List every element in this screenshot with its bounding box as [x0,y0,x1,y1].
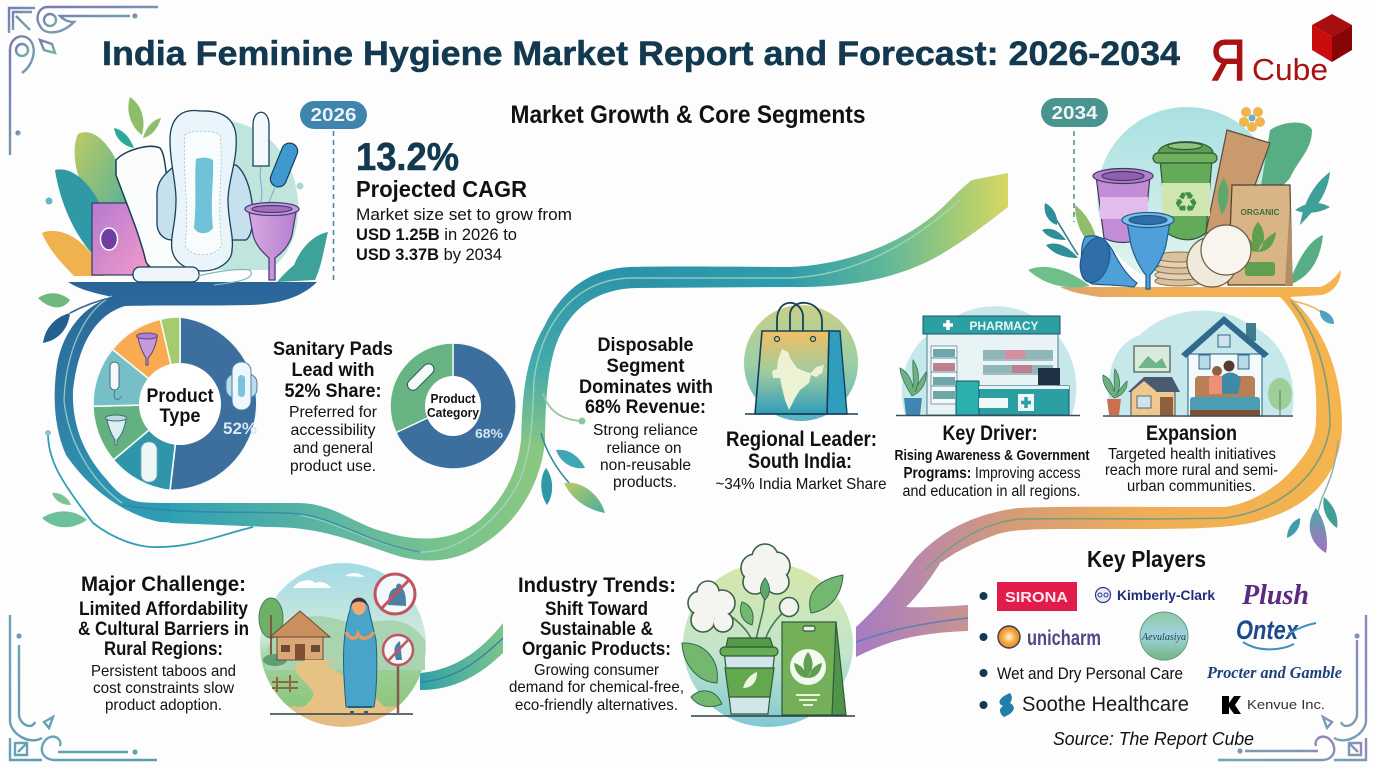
logo: Kenvue: Kenvue Inc. [1247,697,1325,712]
text block: disposable segment: products. [613,474,677,491]
pad stack [1155,252,1203,286]
text block: expansion: Expansion [1146,422,1237,445]
pharmacy shelves [931,346,1053,404]
text block: industry trends: Sustainable & [540,619,653,640]
logo: The Report Cube: Я [1210,28,1246,93]
menstrual cup [245,202,299,280]
logo: Procter and Gamble: Procter and Gamble [1206,663,1342,682]
logo: Kenvue [1222,696,1325,714]
ribbon: orange growth path [914,270,1342,570]
text block: disposable segment: 68% Revenue: [585,397,706,418]
logo: unicharm [998,626,1101,650]
donut chart: product type [93,317,257,490]
donut labels: product type: Type [160,406,200,427]
subtitle heading: Market Growth & Core Segments [510,101,866,129]
fence [272,675,298,692]
decorative vine: lower left [42,430,253,547]
illustration: 2034 sustainable products [1028,107,1330,289]
path [295,660,388,714]
pharmacy plant [900,360,926,415]
text block: sanitary pads: 52% Share: [284,381,382,402]
donut chart: product category [390,343,516,469]
logo: Aevulasiya [1140,612,1188,660]
text block: industry trends: eco-friendly alternatives. [515,697,678,714]
ribbon: section behind rural circle [420,623,503,690]
organic bag: ORGANIC [1240,207,1280,217]
ribbon: upper section toward 2034 [630,173,1008,288]
icon: liner in category donut [405,361,436,393]
kraft pouch [1206,130,1270,240]
stat block: CAGR: 13.2% [356,136,459,179]
text block: regional leader: ~34% India Market Share [716,476,887,493]
text block: major challenge: product adoption. [105,697,222,714]
text block: industry trends: demand for chemical-free, [509,679,684,696]
green bag [782,622,846,715]
donut chart: product category: Category [427,406,479,420]
title: India Feminine Hygiene Market Report and Forecast: 2026-2034 [102,35,1180,73]
text block: sanitary pads: Preferred for [289,404,378,421]
cotton stems [715,590,788,640]
pink packet [92,203,148,275]
tampon blue [262,141,300,205]
donut labels: product type: 52% [223,419,257,438]
hut [263,611,330,666]
text block: major challenge: Major Challenge: [81,573,246,596]
right leaves [1258,122,1330,285]
text block: major challenge [78,573,249,714]
donut labels: product type [146,386,257,438]
woman in sari [344,597,377,712]
stat block: CAGR [356,136,572,264]
left leaves [1028,203,1098,287]
corner ornament: bottom right [1218,615,1366,760]
tipped blue cup [1076,234,1137,287]
organic bag [1228,185,1293,285]
logo: Plush: Plush [1241,580,1309,611]
bed and family [1190,360,1260,416]
clouds [293,573,364,588]
text block: regional leader: South India: [748,450,852,473]
text block: disposable segment: Dominates with [579,377,713,398]
cotton boll fill [689,545,789,631]
ribbon: teal to green river, part one around product type donut [55,282,317,527]
logo: unicharm: unicharm [1027,627,1101,650]
text block: disposable segment [579,335,713,491]
logo: The Report Cube: Cube [1252,52,1328,87]
ribbon inner highlight lines [64,200,960,552]
text block: sanitary pads: Sanitary Pads [273,339,393,360]
illustration: home and family expansion [1103,311,1293,416]
text block: disposable segment: Segment [606,356,685,377]
stat block: CAGR: USD 1.25B in 2026 to [356,226,517,244]
badge: 2026: 2026 [310,105,356,125]
text block: disposable segment: Strong reliance [593,422,698,439]
source note: Source: The Report Cube [1053,728,1254,749]
badge: 2034 [1041,98,1108,127]
cotton leaves [682,575,843,707]
green reusable cup: ♻ [1173,186,1199,219]
logo: Kimberly-Clark: Kimberly-Clark [1117,588,1215,603]
text block: disposable segment: reliance on [606,440,682,457]
wall picture [1134,346,1170,372]
badge: 2026 [300,101,367,129]
ribbon: lower wave [170,440,545,561]
tampon white [253,112,269,202]
corner ornament: top left [9,7,158,155]
green cup [720,638,778,714]
logo: Sirona [997,582,1077,611]
dashed connector: 2034 [1073,131,1075,222]
icon: cup in orange wedge [136,333,158,365]
donut chart: product category: Product [430,392,476,406]
text block: key driver: Rising Awareness & Government [894,447,1090,464]
icon: cup in green wedge [106,415,126,445]
text block: sanitary pads: accessibility [290,422,376,439]
text block: expansion: reach more rural and semi- [1105,462,1278,479]
heading: key players: Key Players [1087,546,1206,572]
sanitary pad [157,111,253,271]
icon: pad in donut [226,362,257,410]
cotton boll outlines [688,544,798,632]
text block: sanitary pads: Lead with [292,360,374,381]
text block: industry trends: Industry Trends: [518,574,676,597]
text block: major challenge: cost constraints slow [93,680,234,697]
corner ornament: bottom left [10,615,157,760]
ribbon: rising section [521,267,640,445]
donut chart: product category: 68% [475,426,503,441]
logo: Sirona: SIRONA [1005,589,1068,606]
text block: key driver: and education in all regions. [902,483,1080,500]
logo: The Report Cube [1210,14,1352,93]
tree [259,598,283,655]
text block: disposable segment: Disposable [598,335,694,356]
logo: Aevulasiya: Aevulasiya [1141,632,1186,643]
text block: major challenge: Rural Regions: [104,639,223,660]
illustration: pharmacy: PHARMACY [970,321,1039,333]
text block: industry trends: Shift Toward [545,599,648,620]
plant and tree [1103,369,1292,415]
stat block: CAGR: Market size set to grow from [356,206,572,224]
map of India [772,349,824,410]
text block: key driver: Programs: Improving access [904,465,1081,482]
flower [1239,107,1265,132]
icon: tampon in teal wedge [110,362,122,399]
purple cup [1093,168,1153,242]
text block: sanitary pads [273,339,393,475]
text block: sanitary pads: and general [293,440,373,457]
text block: expansion: urban communities. [1127,478,1256,495]
badge: 2034: 2034 [1052,103,1098,123]
decorative sprigs: right side [1287,300,1338,553]
text block: expansion [1105,422,1278,495]
text block: industry trends: Growing consumer [534,662,660,679]
text block: regional leader [716,428,887,493]
company: Wet and Dry Personal Care: Wet and Dry Personal Care [997,664,1183,683]
upright blue cup [1122,212,1174,289]
tampon horizontal [133,267,251,285]
text block: major challenge: Limited Affordability [79,599,248,620]
icon: liner in teal wedge [141,442,157,482]
illustration: rural woman and barriers [259,563,426,727]
logo: Ontex: Ontex [1236,615,1299,645]
donut labels: product type: Product [146,386,214,407]
text block: expansion: Targeted health initiatives [1108,446,1276,463]
text block: key driver [894,422,1090,500]
pharmacy counter [956,368,1069,415]
text block: regional leader: Regional Leader: [726,428,877,451]
text block: sanitary pads: product use. [290,458,376,475]
decorative sprout: middle [541,393,605,513]
illustration: cotton and eco products [682,544,855,727]
bullets [980,592,988,709]
text block: major challenge: Persistent taboos and [91,663,236,680]
decorative leaves: upper left [38,293,114,343]
illustration: pharmacy [896,306,1080,416]
panel: key players [980,546,1342,717]
text block: key driver: Key Driver: [942,422,1038,445]
cotton pads [1187,225,1251,287]
text block: disposable segment: non-reusable [600,457,691,474]
illustration: shopping bag with India map [744,303,858,421]
main house [1181,316,1269,416]
text block: major challenge: & Cultural Barriers in [78,619,249,640]
stat block: CAGR: USD 3.37B by 2034 [356,246,502,264]
small house [1128,377,1180,416]
panty liner [116,146,192,273]
text block: industry trends: Organic Products: [522,639,671,660]
stat block: CAGR: Projected CAGR [356,176,527,202]
logo: Soothe Healthcare: Soothe Healthcare [1022,693,1189,716]
illustration: 2026 disposable products [42,97,328,285]
text block: industry trends [509,574,684,714]
dashed connector: 2026 [332,131,334,282]
green reusable cup [1153,142,1217,240]
ribbon: purple connector to orange path [856,560,968,657]
no-entry signs [375,574,415,713]
